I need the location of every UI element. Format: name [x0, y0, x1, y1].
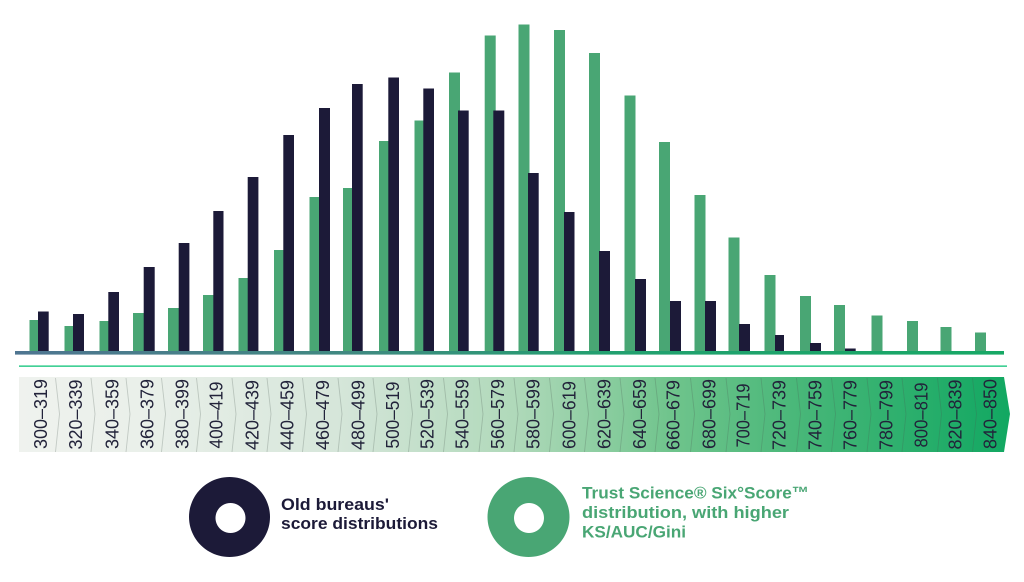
icon: green donut	[488, 477, 570, 557]
legend text: old bureaus: Old bureaus'	[281, 495, 389, 514]
green bars: Six°Score distribution	[30, 24, 986, 352]
score range labels: 500–519	[383, 382, 403, 448]
score range labels: 440–459	[278, 380, 298, 450]
score range labels: 620–639	[594, 379, 614, 449]
score range labels: 340–359	[102, 379, 122, 449]
legend text: old bureaus: score distributions	[281, 514, 438, 533]
icon: dark donut	[189, 477, 270, 557]
score range labels: 660–679	[664, 380, 684, 450]
separator line	[19, 365, 1007, 367]
score range labels: 320–339	[66, 379, 86, 450]
legend: Trust Science	[488, 477, 809, 557]
score range labels: 760–779	[840, 380, 860, 450]
score range labels: 840–850	[980, 379, 1000, 449]
score range labels: 380–399	[172, 379, 192, 449]
score range labels: 600–619	[560, 381, 580, 449]
score range labels: 680–699	[700, 379, 720, 449]
score range labels: 780–799	[876, 380, 896, 450]
score range labels: 400–419	[206, 382, 226, 448]
score range labels: 300–319	[31, 379, 51, 449]
score range labels	[31, 379, 1000, 450]
legend text: Trust Science: Trust Science® Six°Score™	[582, 484, 809, 502]
score range labels: 540–559	[452, 379, 472, 449]
score range labels: 420–439	[242, 380, 262, 450]
legend: old bureaus	[189, 477, 438, 557]
score range labels: 720–739	[770, 380, 790, 450]
score range labels: 800–819	[912, 382, 932, 448]
score range labels: 520–539	[418, 379, 438, 449]
score range labels: 740–759	[806, 380, 826, 450]
legend text: Trust Science: distribution, with higher	[582, 503, 789, 522]
chevron dividers	[56, 378, 976, 452]
band background	[19, 377, 1010, 452]
score range labels: 700–719	[734, 384, 754, 448]
score range labels: 560–579	[488, 379, 508, 449]
dark bars: old bureaus distribution	[38, 78, 856, 352]
score range labels: 820–839	[946, 379, 966, 450]
score range labels: 580–599	[524, 379, 544, 449]
score range labels: 460–479	[313, 380, 333, 450]
legend text: Trust Science: KS/AUC/Gini	[582, 522, 686, 542]
score range labels: 480–499	[348, 380, 368, 450]
score range labels: 640–659	[630, 379, 650, 449]
score range arrow band	[19, 377, 1010, 452]
chart baseline	[15, 351, 1004, 355]
score range labels: 360–379	[138, 379, 158, 449]
bar chart: score distributions	[15, 24, 1004, 355]
